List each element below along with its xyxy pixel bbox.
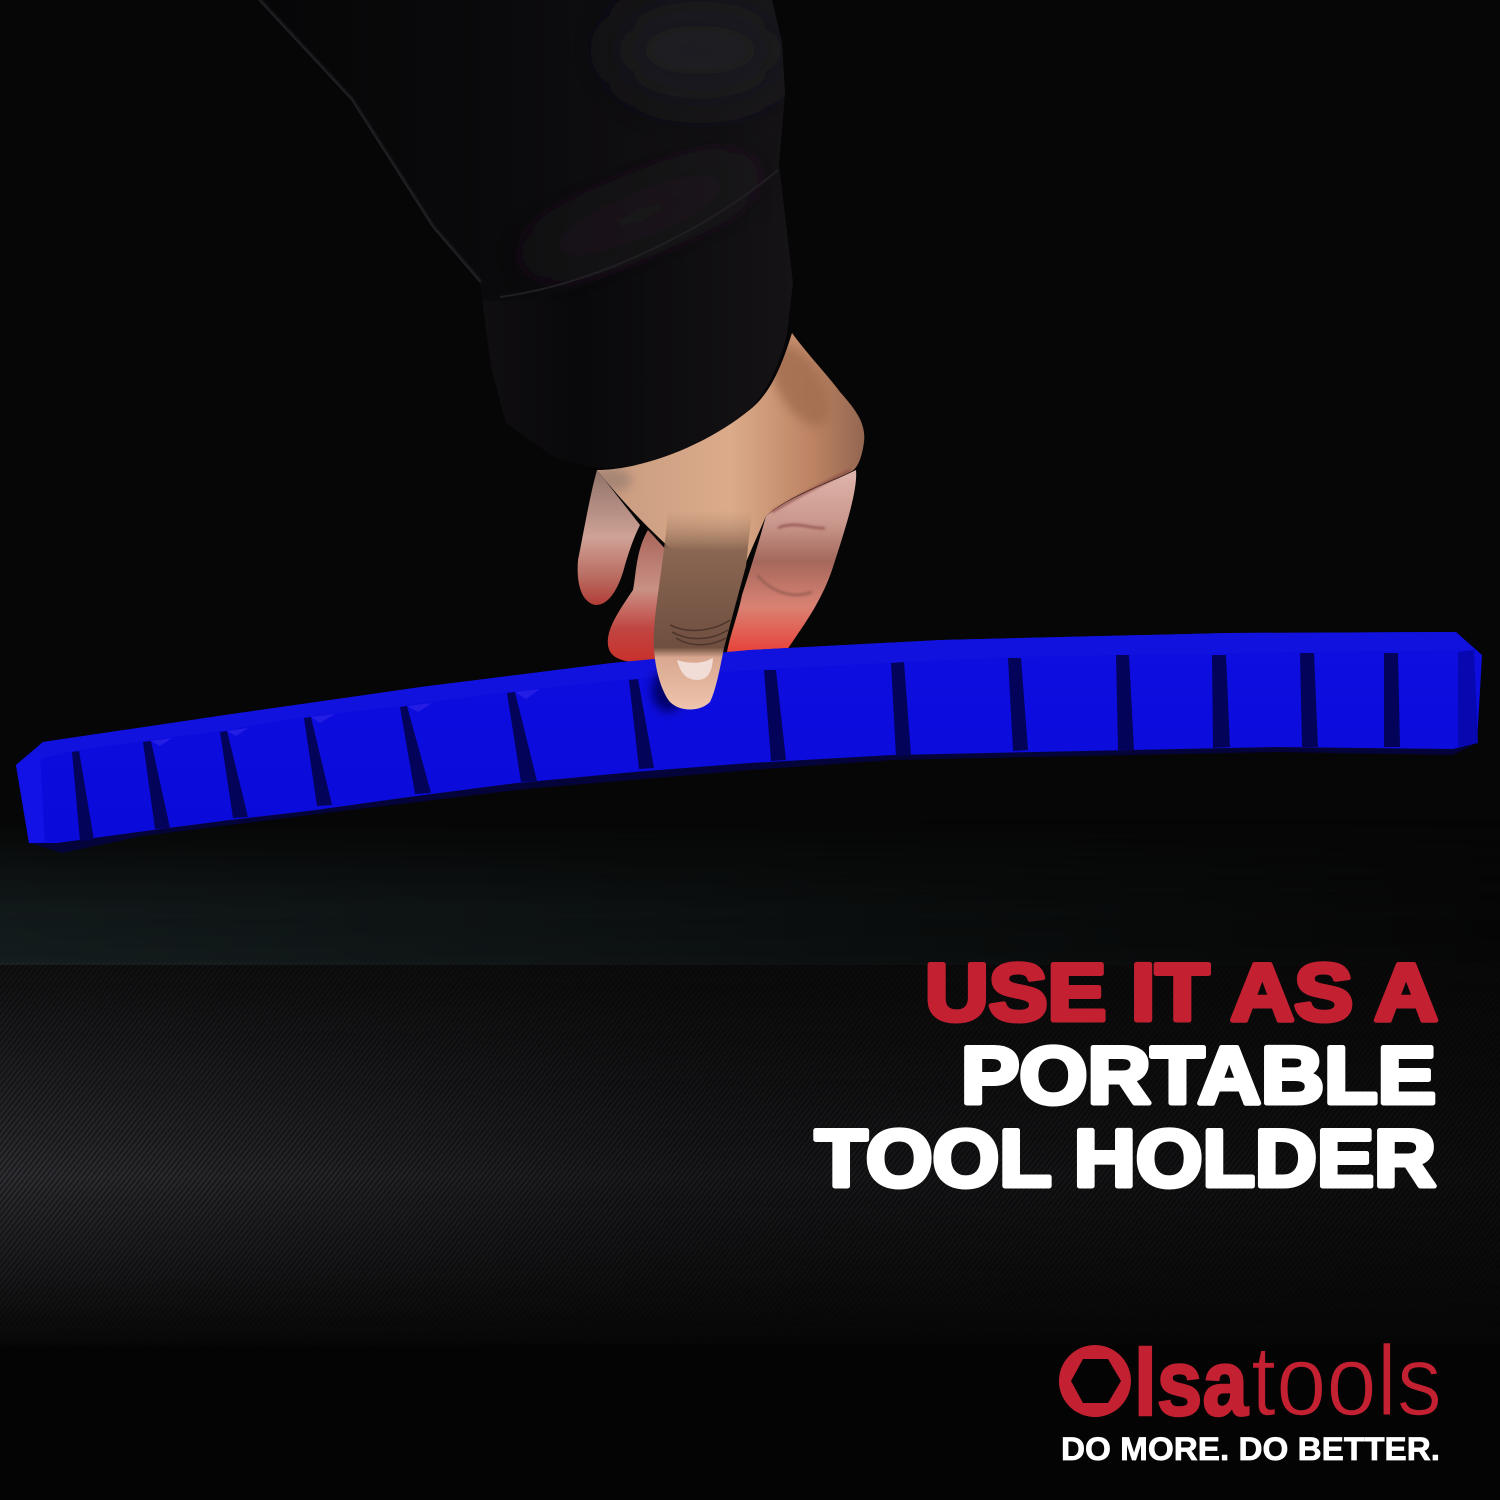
shadow on bar: [652, 668, 684, 712]
segment highlights: [151, 689, 540, 746]
line one: USE IT AS A: [925, 948, 1438, 1038]
bar body: [16, 632, 1482, 843]
back of hand: [597, 333, 864, 565]
tagline: DO MORE. DO BETTER.: [1061, 1431, 1440, 1467]
groove slots: [72, 653, 1400, 841]
blue tool holder bar: [16, 632, 1482, 853]
thumb: [652, 510, 752, 712]
icon: hex socket O: [1059, 1345, 1131, 1417]
headline: [815, 948, 1438, 1204]
middle finger: [608, 530, 668, 662]
line two: PORTABLE: [961, 1031, 1436, 1121]
thumb body: [654, 510, 752, 710]
wordmark light: tools: [1251, 1325, 1442, 1437]
end shade left: [16, 752, 45, 843]
hand and fingers: [578, 333, 864, 662]
sleeve: [258, 0, 800, 480]
knuckle crease: [772, 470, 850, 528]
background: [0, 854, 1500, 1322]
end shade right: [1458, 650, 1478, 747]
line three: TOOL HOLDER: [815, 1114, 1436, 1204]
ring finger: [727, 470, 856, 652]
top strip: [16, 632, 1474, 765]
logo: [1059, 1325, 1442, 1467]
thumbnail: [677, 658, 713, 680]
underside shadow: [29, 735, 1477, 853]
wordmark bold: lsa: [1134, 1330, 1249, 1435]
knuckle wrinkles: [670, 620, 730, 645]
little finger: [578, 470, 640, 605]
